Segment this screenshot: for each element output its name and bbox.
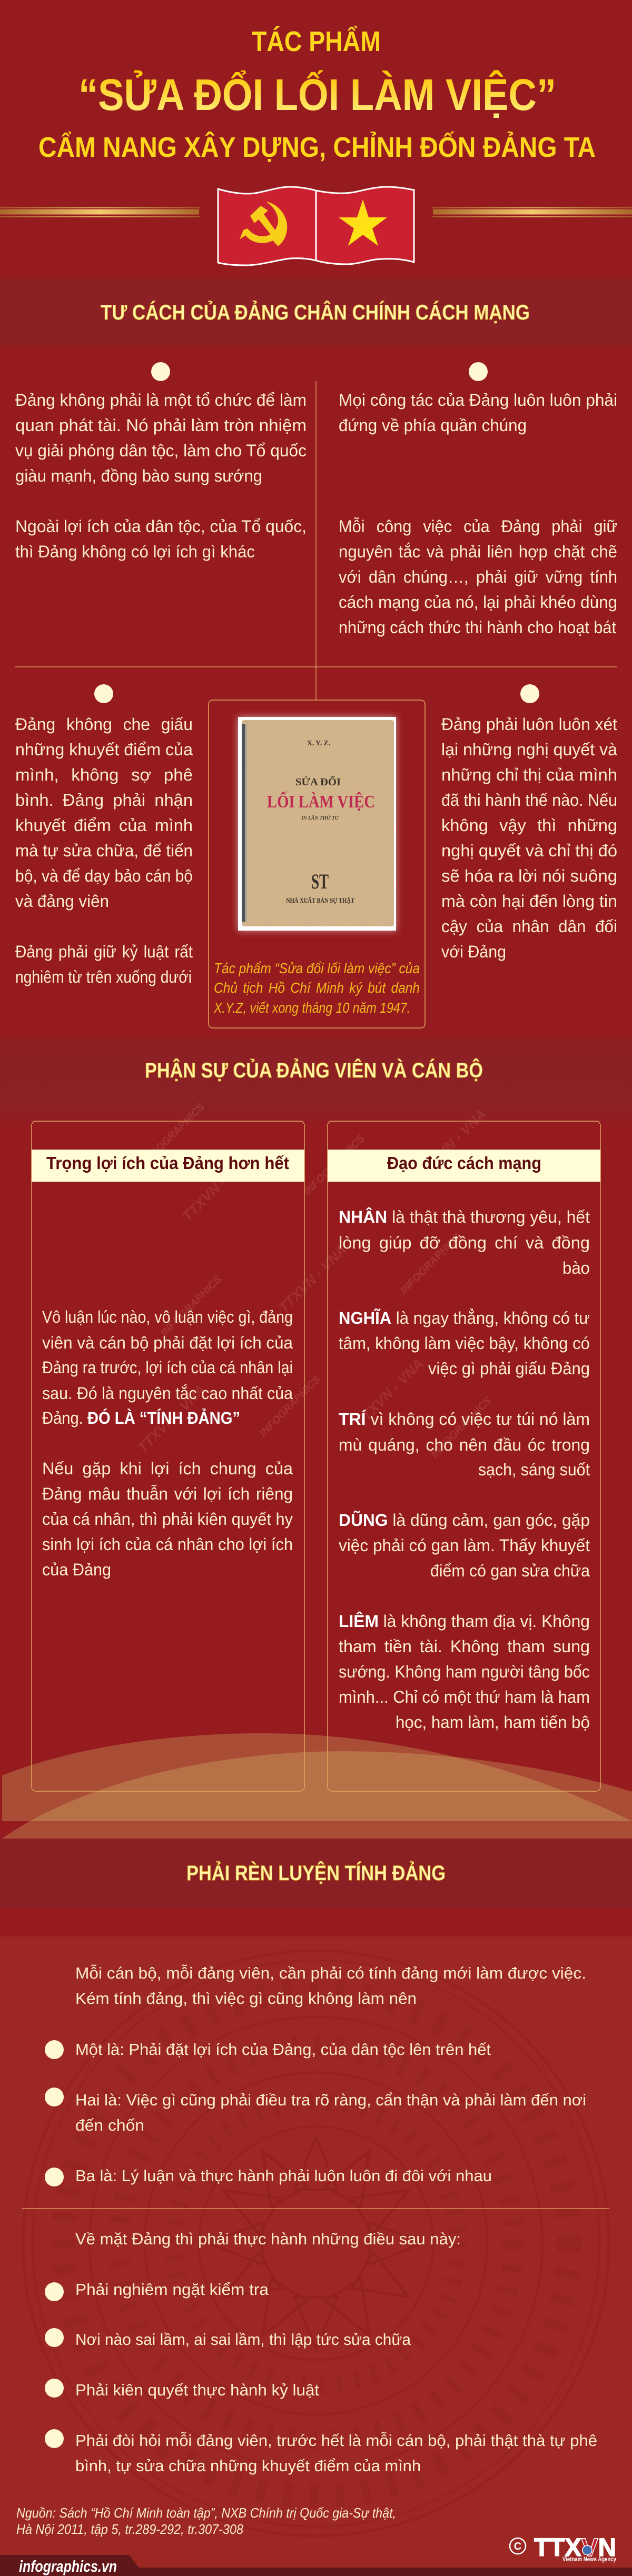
panel: bottom left principle: nghiêm từ trên xuống dưới [15, 967, 192, 986]
list intro: Về mặt Đảng thì phải thực hành những điều sau này: [75, 2230, 461, 2248]
source note [16, 2505, 396, 2537]
panel: top right principle [339, 362, 617, 637]
panel: bottom right principle: nghị quyết và chỉ thị đó [441, 841, 617, 860]
bullet [520, 684, 539, 703]
footer strip with site name [0, 2555, 632, 2576]
panel: top left principle: Ngoài lợi ích của dân tộc, của Tổ quốc, [15, 517, 307, 536]
item: self-criticism: Phải đòi hỏi mỗi đảng viên, trước hết là mỗi cán bộ, phải thật thà tự phê [75, 2431, 597, 2450]
panel text: Đảng. ĐÓ LÀ “TÍNH ĐẢNG” [42, 1409, 240, 1427]
book cover photo: LỐI LÀM VIỆC [267, 791, 375, 812]
watermarks: TTXVN - VNA [415, 1106, 489, 1180]
bullet [151, 362, 170, 381]
watermarks: INFOGRAPHICS [429, 1394, 494, 1460]
panel: top left principle [15, 362, 307, 561]
item: discipline: Phải kiên quyết thực hành kỷ luật [75, 2381, 319, 2399]
item: inspection: Phải nghiêm ngặt kiểm tra [75, 2280, 269, 2299]
panel: top right principle: cách mạng của nó, lại phải khéo dùng [339, 593, 617, 612]
panel: bottom left principle: Đảng không che giấu [15, 715, 193, 734]
caption: Tác phẩm “Sửa đổi lối làm việc” của [214, 960, 420, 976]
ethic: tri [339, 1410, 590, 1479]
ethic: liem: LIÊM là không tham địa vị. Không [339, 1612, 590, 1631]
panel: bottom right principle: lại những nghị quyết và [441, 740, 617, 759]
panel: bottom right principle: với Đảng [441, 942, 506, 961]
item two [45, 2088, 586, 2134]
watermarks: INFOGRAPHICS [302, 1132, 367, 1198]
ethic: tri: TRÍ vì không có việc tư túi nó làm [339, 1410, 590, 1429]
item: self-criticism: bình, tự sửa chữa những khuyết điểm của mình [75, 2457, 421, 2475]
decorative arcs [2, 1733, 632, 1839]
caption: Chủ tịch Hồ Chí Minh ký bút danh [214, 980, 420, 996]
intro text: Mỗi cán bộ, mỗi đảng viên, cần phải có tính đảng mới làm được việc. [75, 1964, 586, 1982]
ethic: nhan [339, 1207, 590, 1277]
panel text: sau. Đó là nguyên tắc cao nhất của [42, 1384, 293, 1403]
panel text: viên và cán bộ phải đặt lợi ích của [42, 1333, 293, 1352]
panel: party interest first [32, 1121, 304, 1791]
ethic: dung: DŨNG là dũng cảm, gan góc, gặp [339, 1511, 590, 1530]
book cover photo [238, 717, 396, 931]
panel: bottom left principle: và đảng viên [15, 892, 109, 911]
caption: X.Y.Z, viết xong tháng 10 năm 1947. [213, 1000, 410, 1016]
title [38, 26, 596, 163]
bullet [94, 684, 113, 703]
watermarks: INFOGRAPHICS [159, 1273, 224, 1339]
section 1 dividers [15, 381, 617, 700]
panel: top left principle: quan phát tài. Nó phải làm tròn nhiệm [15, 416, 307, 435]
bronze drum background pattern [23, 1951, 609, 2536]
panel: bottom right principle: sẽ hóa ra lời nói suông [441, 866, 617, 885]
caption [213, 960, 420, 1016]
book cover photo: IN LẦN THỨ TƯ [301, 815, 339, 821]
ethic: nghia: tâm, không làm việc bậy, không có [339, 1334, 590, 1353]
watermarks: TTXVN - VNA [275, 1242, 350, 1316]
panel: top right principle: đứng về phía quần chúng [339, 416, 527, 435]
item: self-criticism [45, 2429, 597, 2475]
panel: bottom right principle: cậy của nhân dân đối [441, 917, 617, 936]
panel: bottom right principle: không vậy thì những [441, 816, 617, 835]
panel text: Đảng mâu thuẫn với lợi ích riêng [42, 1484, 293, 1503]
ethic: nghia: NGHĨA là ngay thẳng, không có tư [339, 1309, 590, 1327]
panel: top left principle: giàu mạnh, đồng bào sung sướng [15, 466, 262, 485]
list: personal requirements [45, 2040, 586, 2186]
panel: revolutionary ethics [328, 1121, 600, 1791]
book cover photo: NHÀ XUẤT BẢN SỰ THẬT [286, 896, 354, 904]
panel header [32, 1150, 304, 1182]
book cover photo: SỬA ĐỔI [295, 775, 341, 788]
intro text: Kém tính đảng, thì việc gì cũng không làm nên [75, 1989, 417, 2008]
panel text: Nếu gặp khi lợi ích chung của [42, 1459, 293, 1478]
item: correction: Nơi nào sai lầm, ai sai lầm, thì lập tức sửa chữa [75, 2330, 411, 2349]
ethic: liem: mình... Chỉ có một thứ ham là ham [339, 1688, 590, 1706]
title: “SỬA ĐỔI LỐI LÀM VIỆC” [78, 70, 556, 119]
panel: bottom right principle: Đảng phải luôn luôn xét [441, 715, 617, 734]
watermarks: INFOGRAPHICS [258, 1373, 323, 1439]
panel text: của cá nhân, thì phải kiên quyết hy [42, 1510, 293, 1529]
panel: top left principle: thì Đảng không có lợi ích gì khác [15, 542, 255, 561]
ethic: tri: sạch, sáng suốt [478, 1460, 590, 1479]
watermarks [134, 1101, 494, 1460]
panel: top left principle: vụ giải phóng dân tộc, làm cho Tổ quốc [15, 441, 307, 460]
panel: top right principle: với dân chúng…, phải giữ vững tính [339, 567, 617, 586]
heading: section 3: PHẢI RÈN LUYỆN TÍNH ĐẢNG [186, 1861, 446, 1885]
panel text: Đảng ra trước, lợi ích của cá nhân lại [42, 1358, 293, 1377]
panel: bottom right principle: mà còn hại đến lòng tin [441, 892, 617, 911]
panel: bottom left principle: mà tự sửa chữa, để tiến [15, 841, 193, 860]
watermarks: INFOGRAPHICS [398, 1231, 463, 1296]
panel: top right principle: nguyên tắc và phải liên hợp chặt chẽ [339, 542, 617, 561]
logo: TTXVN: Vietnam News Agency [562, 2555, 616, 2563]
ethic: liem: sướng. Không ham người tâng bốc [339, 1662, 590, 1681]
ethic: nhan: NHÂN là thật thà thương yêu, hết [339, 1207, 590, 1226]
ethic: dung: việc phải có gan làm. Thấy khuyết [339, 1536, 590, 1555]
ethic: liem: học, ham làm, ham tiến bộ [396, 1713, 590, 1732]
ethic: nhan: lòng giúp đỡ đồng chí và đồng [339, 1233, 590, 1252]
panel: bottom left principle: khuyết điểm của mình [15, 816, 193, 835]
panel text [42, 1307, 293, 1579]
panel: bottom left principle: Đảng phải giữ kỷ luật rất [15, 942, 193, 961]
item two: đến chốn [75, 2116, 144, 2134]
panel: bottom left principle: mình, không sợ phê [15, 765, 193, 784]
panel text: sinh lợi ích của cá nhân cho lợi ích [42, 1535, 293, 1554]
panel text: Vô luận lúc nào, vô luận việc gì, đảng [42, 1307, 293, 1326]
bullet [469, 362, 488, 381]
panel: bottom left principle [15, 684, 193, 986]
panel header [328, 1150, 600, 1182]
ethic: liem [339, 1612, 590, 1732]
panel: bottom right principle: những chỉ thị của mình [441, 765, 617, 784]
watermarks: TTXVN - VNA [134, 1382, 209, 1456]
panel: bottom left principle: bình. Đảng phải nhận [15, 791, 193, 810]
gold ribbons beside flag [0, 207, 632, 217]
source note: Hà Nội 2011, tập 5, tr.289-292, tr.307-308 [16, 2521, 243, 2537]
panel header: Đạo đức cách mạng [387, 1153, 541, 1173]
watermarks: TTXVN - VNA [179, 1150, 253, 1224]
watermarks: TTXVN - VNA [352, 1355, 427, 1430]
title: TÁC PHẨM [252, 26, 381, 57]
icon: star [339, 199, 387, 246]
panel: top right principle: Mỗi công việc của Đảng phải giữ [339, 517, 617, 536]
logo: TTXVN: C [514, 2541, 521, 2552]
source note: Nguồn: Sách “Hồ Chí Minh toàn tập”, NXB Chính trị Quốc gia-Sự thật, [16, 2505, 396, 2521]
ethic: dung [339, 1511, 590, 1580]
panel: book callout [209, 700, 425, 1028]
icon: hammer and sickle [240, 202, 287, 246]
item two: Hai là: Việc gì cũng phải điều tra rõ ràng, cẩn thận và phải làm đến nơi [75, 2091, 586, 2109]
panel: bottom right principle [441, 684, 617, 961]
watermarks: INFOGRAPHICS [142, 1101, 207, 1166]
heading: section 1: TƯ CÁCH CỦA ĐẢNG CHÂN CHÍNH CÁCH MẠNG [101, 300, 530, 324]
book cover photo: X. Y. Z. [307, 740, 330, 747]
logo: TTXVN: TTXVN [534, 2534, 616, 2562]
panel: bottom left principle: những khuyết điểm của [15, 740, 193, 759]
heading: section 2: PHẬN SỰ CỦA ĐẢNG VIÊN VÀ CÁN BỘ [145, 1058, 483, 1082]
list: party requirements [45, 2280, 597, 2475]
ethic: tri: mù quáng, cho nên đầu óc trong [339, 1435, 590, 1454]
ethic: liem: tham tiền tài. Không tham sung [339, 1637, 590, 1656]
ethic: nghia [339, 1309, 590, 1378]
panel: top right principle: Mọi công tác của Đảng luôn luôn phải [339, 391, 617, 410]
item one: Một là: Phải đặt lợi ích của Đảng, của dân tộc lên trên hết [75, 2040, 491, 2059]
item three: Ba là: Lý luận và thực hành phải luôn luôn đi đôi với nhau [75, 2166, 492, 2185]
panel: bottom right principle: đã thi hành thế nào. Nếu [441, 791, 617, 810]
intro text [75, 1964, 586, 2008]
panel: bottom left principle: bộ, và để dạy bảo cán bộ [15, 866, 193, 885]
book cover photo: ST [311, 870, 329, 893]
panel: top left principle: Đảng không phải là một tổ chức để làm [15, 391, 307, 410]
panel text: của Đảng [42, 1560, 111, 1579]
ethic: nghia: việc gì phải giấu Đảng [428, 1359, 590, 1378]
footer strip with site name: infographics.vn [19, 2557, 117, 2575]
ethic: nhan: bào [562, 1259, 590, 1277]
ethic: dung: điểm có gan sửa chữa [430, 1561, 590, 1580]
panel: top right principle: những cách thức thi hành cho hoạt bát [339, 618, 616, 637]
panel header: Trọng lợi ích của Đảng hơn hết [46, 1153, 289, 1173]
icon: party and national flags [218, 187, 414, 265]
